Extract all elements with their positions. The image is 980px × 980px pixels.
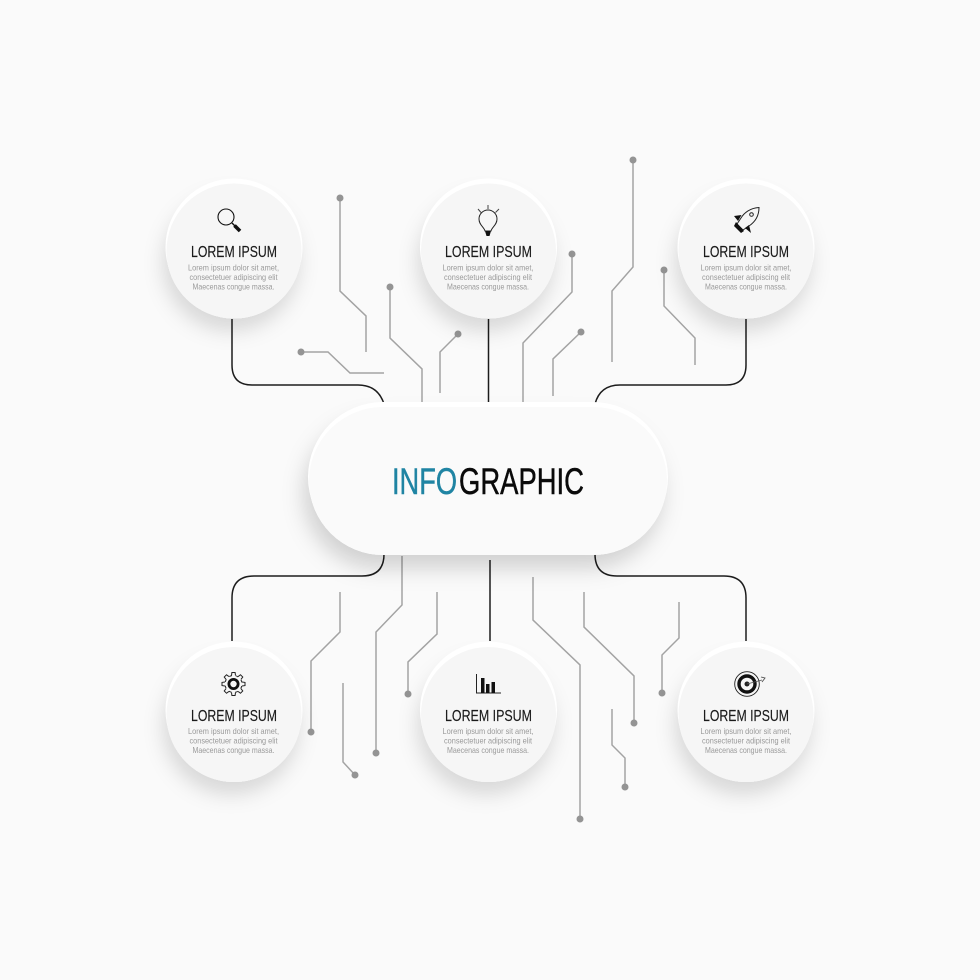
panel: settings: consectetuer adipiscing elit: [190, 736, 278, 746]
panel: idea: consectetuer adipiscing elit: [444, 273, 533, 282]
panel: analytics: LOREM IPSUM: [445, 708, 532, 725]
panel: settings: LOREM IPSUM: [191, 708, 277, 725]
panel: search: Lorem ipsum dolor sit amet,: [188, 264, 279, 272]
panel: analytics: Maecenas congue massa.: [447, 746, 529, 755]
icon: target: [735, 672, 765, 696]
panel: idea: Lorem ipsum dolor sit amet,: [442, 264, 534, 272]
panel: analytics: consectetuer adipiscing elit: [444, 736, 533, 746]
icon: magnifier: [218, 209, 240, 231]
panel: search: Maecenas congue massa.: [192, 282, 274, 292]
panel: target: Lorem ipsum dolor sit amet,: [700, 727, 792, 736]
panel: launch: consectetuer adipiscing elit: [702, 273, 791, 282]
panel: target: Maecenas congue massa.: [705, 746, 787, 755]
title: GRAPHIC: [459, 460, 584, 502]
central pill: [308, 402, 668, 555]
circuit lines: top: [298, 156, 695, 402]
panel: settings: [166, 642, 302, 782]
panel: launch: Lorem ipsum dolor sit amet,: [700, 264, 792, 272]
panel: idea: Maecenas congue massa.: [447, 282, 529, 292]
panel: launch: Maecenas congue massa.: [705, 282, 787, 292]
icon: rocket: [734, 208, 759, 233]
panel: search: [166, 178, 302, 318]
title: [392, 460, 584, 502]
panel: target: consectetuer adipiscing elit: [702, 736, 791, 746]
panel: launch: [678, 178, 814, 318]
black connectors: [232, 319, 746, 641]
icon: light bulb: [478, 205, 499, 236]
panel: target: LOREM IPSUM: [703, 708, 789, 725]
panel: target: [678, 642, 814, 782]
circuit lines: bottom: [308, 556, 679, 822]
panel: analytics: Lorem ipsum dolor sit amet,: [442, 727, 534, 736]
panel: settings: Lorem ipsum dolor sit amet,: [188, 727, 279, 736]
panel: search: LOREM IPSUM: [191, 244, 277, 261]
panel: idea: LOREM IPSUM: [445, 244, 532, 261]
icon: bar chart: [476, 674, 501, 693]
panel: search: consectetuer adipiscing elit: [190, 273, 278, 282]
panel: analytics: [420, 642, 557, 782]
panel: launch: LOREM IPSUM: [703, 244, 789, 261]
panel: settings: Maecenas congue massa.: [192, 746, 274, 755]
icon: gear: [222, 672, 245, 696]
title: INFO: [392, 460, 457, 502]
panel: idea: [420, 178, 557, 318]
